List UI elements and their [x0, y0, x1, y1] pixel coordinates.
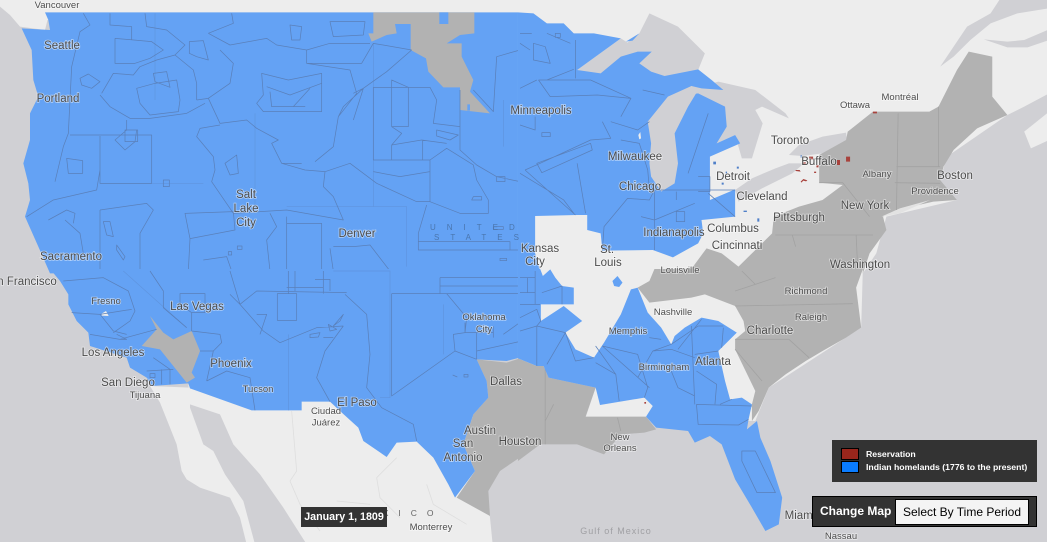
land: Canada and Vancouver Island	[0, 0, 522, 30]
homeland boundaries	[63, 271, 522, 441]
label: Detroit: Detroit	[716, 171, 751, 183]
unclaimed area: Southeast	[638, 269, 863, 421]
label: Miami: Miami	[785, 510, 815, 522]
southwest quadrant	[50, 269, 522, 542]
small homeland parcels	[439, 12, 470, 111]
label: Mexico: MEXICO	[350, 508, 444, 518]
reservations	[796, 112, 877, 183]
label: Gulf of Mexico: Gulf of Mexico	[580, 526, 652, 536]
northwest quadrant	[0, 0, 522, 273]
Lake Michigan	[648, 86, 698, 192]
homeland boundaries	[520, 33, 735, 251]
label: Atlanta: Atlanta	[695, 356, 732, 368]
label: Kansas City: Kansas	[521, 243, 559, 255]
date label	[301, 507, 387, 527]
label: New Orleans: Orleans	[603, 443, 637, 454]
label: Memphis: Memphis	[609, 326, 648, 337]
small homeland parcel	[612, 276, 623, 287]
label: Birmingham: Birmingham	[639, 362, 689, 373]
Nova Scotia	[1024, 112, 1047, 148]
label: Los Angeles: Los Angeles	[82, 347, 145, 359]
label: Houston: Houston	[499, 436, 541, 448]
label: Fresno: Fresno	[91, 296, 121, 307]
label: Vancouver: Vancouver	[35, 0, 79, 11]
label: Denver: Denver	[338, 228, 376, 240]
unclaimed area: Dakotas	[368, 12, 490, 113]
legend swatch: reservation	[841, 448, 859, 460]
homelands: upper Midwest	[518, 12, 740, 273]
label: Phoenix: Phoenix	[210, 358, 252, 370]
label: San Antonio: San	[453, 438, 473, 450]
label: Oklahoma City: City	[476, 324, 492, 335]
label: Louisville: Louisville	[660, 265, 700, 276]
label: Buffalo: Buffalo	[801, 156, 837, 168]
legend panel	[832, 440, 1037, 482]
state borders	[545, 271, 853, 444]
label: Tijuana: Tijuana	[130, 390, 161, 401]
label: Raleigh: Raleigh	[795, 312, 827, 323]
unclaimed area: Texas	[457, 358, 522, 516]
label: Salt Lake City: Lake	[234, 203, 258, 215]
Lake Erie	[735, 163, 804, 202]
label: St. Louis: St.	[600, 244, 614, 256]
southeast quadrant	[518, 269, 863, 531]
label: Pittsburgh: Pittsburgh	[773, 212, 825, 224]
label: Indianapolis: Indianapolis	[643, 227, 705, 239]
small homeland parcels	[713, 155, 802, 222]
label: San Antonio: Antonio	[443, 452, 483, 464]
label: Ciudad Juarez: Ciudad	[311, 406, 341, 417]
label: Tucson: Tucson	[243, 384, 273, 395]
unclaimed area: Louisiana and Mississippi	[518, 358, 656, 461]
label: Montreal: Montréal	[882, 92, 918, 103]
label: San Diego: San Diego	[101, 377, 155, 389]
select box: Select By Time Period	[903, 505, 1021, 519]
Lake Ontario	[789, 133, 848, 156]
label: Toronto: Toronto	[771, 135, 809, 147]
label: Boston: Boston	[937, 170, 973, 182]
label: Oklahoma City: Oklahoma	[462, 312, 506, 323]
label: Kansas City: City	[525, 256, 545, 268]
homeland boundaries	[520, 271, 775, 493]
legend swatch: Indian homelands	[841, 461, 859, 473]
label: Cleveland: Cleveland	[736, 191, 788, 203]
St. Lawrence channel	[984, 29, 1047, 47]
label: Seattle: Seattle	[44, 40, 80, 52]
label: New York: New York	[841, 200, 890, 212]
mainland Mexico	[188, 384, 493, 542]
label: Chicago: Chicago	[619, 181, 661, 193]
homelands: southwest	[50, 269, 522, 498]
label: Salt Lake City: City	[236, 217, 256, 229]
homelands: southeast	[518, 269, 782, 531]
label: States line: STATES	[434, 233, 530, 242]
Lake Superior	[577, 13, 725, 93]
label: El Paso: El Paso	[337, 397, 377, 409]
reservation dot	[644, 402, 646, 404]
label: Albany: Albany	[862, 169, 892, 180]
label: Richmond: Richmond	[785, 286, 827, 297]
white gap at Milwaukee	[638, 132, 641, 139]
date label: January 1, 1809	[304, 511, 384, 523]
label: Nashville: Nashville	[654, 307, 692, 318]
label: Sacramento: Sacramento	[40, 251, 102, 263]
St. Lawrence estuary	[940, 0, 1047, 67]
label: Salt Lake City: Salt	[236, 189, 257, 201]
legend text: reservation: Reservation	[866, 449, 916, 459]
label: Nassau: Nassau	[825, 531, 857, 542]
land: South	[518, 269, 863, 421]
label: St. Louis: Louis	[594, 257, 622, 269]
label: Portland: Portland	[37, 93, 79, 105]
label: Minneapolis: Minneapolis	[510, 105, 572, 117]
state borders	[100, 13, 503, 267]
select box	[895, 499, 1029, 525]
Lake Huron	[688, 82, 789, 158]
label: Monterrey: Monterrey	[410, 522, 453, 533]
Long Island	[881, 200, 930, 217]
label: Austin: Austin	[464, 425, 496, 437]
northeast quadrant	[518, 0, 1047, 273]
homelands: northwest	[22, 12, 522, 273]
Isle Royale	[626, 33, 639, 42]
change map control	[812, 496, 1037, 527]
label: Milwaukee: Milwaukee	[608, 151, 662, 163]
label: United States: UNITED	[430, 223, 526, 232]
label: New Orleans: New	[610, 432, 630, 443]
homeland boundaries	[27, 13, 520, 271]
unclaimed area: Northeast	[688, 52, 1007, 273]
label: Ottawa: Ottawa	[840, 100, 871, 111]
legend text: Indian homelands: Indian homelands (1776 to the present)	[866, 462, 1027, 472]
label: Ciudad Juarez: Juárez	[312, 418, 341, 428]
Baja California	[150, 386, 255, 542]
label: Washington: Washington	[830, 259, 890, 271]
unclaimed area: Southern California	[142, 316, 200, 383]
land: Canada and the Midwest	[518, 0, 1047, 273]
label: Charlotte: Charlotte	[747, 325, 793, 337]
state borders	[123, 271, 443, 410]
label: Las Vegas: Las Vegas	[170, 301, 224, 313]
label: Cincinnati: Cincinnati	[712, 240, 762, 252]
change map label: Change Map	[820, 504, 891, 518]
white gap near Fresno	[102, 311, 109, 316]
Mexican state borders	[290, 411, 467, 531]
state borders	[775, 107, 940, 271]
label: Dallas: Dallas	[490, 376, 522, 388]
label: Providence: Providence	[911, 186, 959, 197]
label: Columbus: Columbus	[707, 223, 759, 235]
